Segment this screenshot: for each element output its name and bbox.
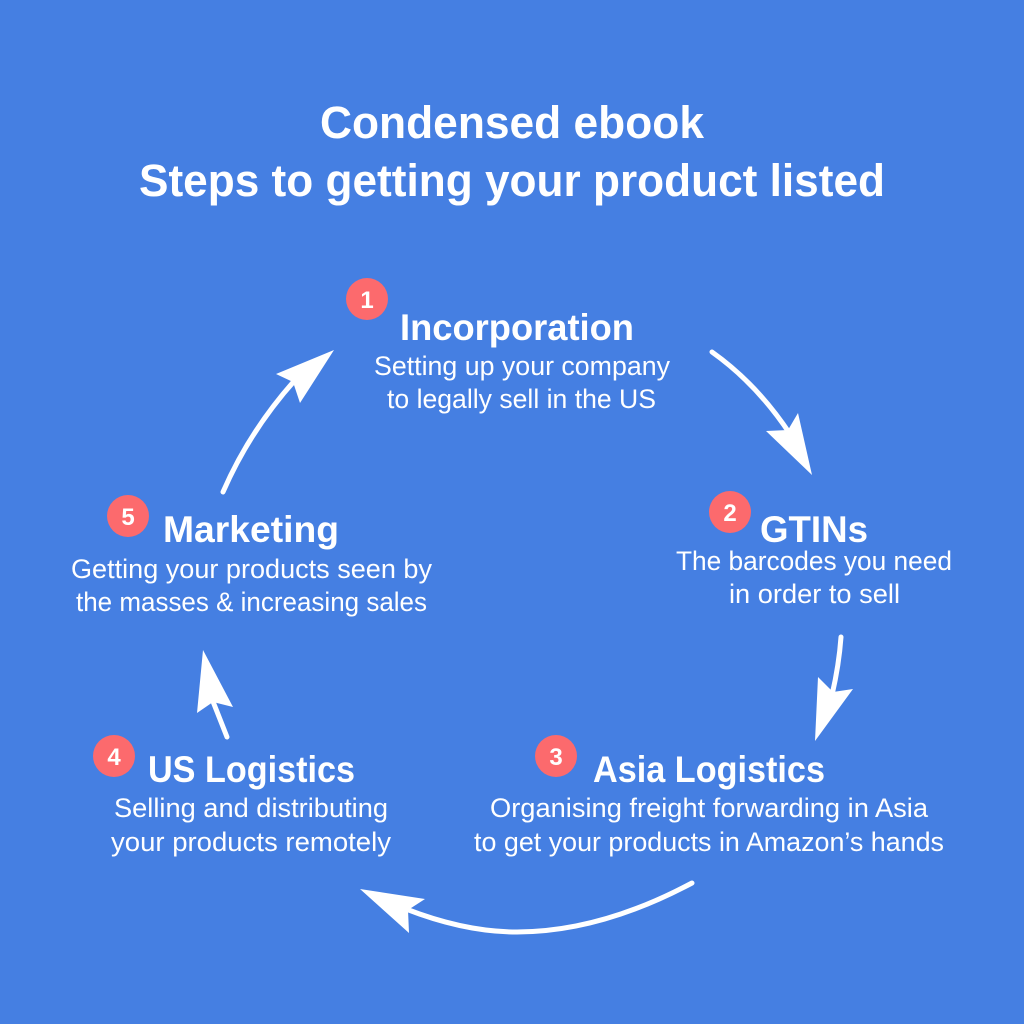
step 2 description: in order to sell: [729, 579, 900, 609]
step 4 heading: US Logistics: [148, 749, 355, 790]
step 2: GTINs: [676, 491, 952, 609]
step 5 description: Getting your products seen by: [71, 554, 433, 584]
title: [139, 97, 885, 206]
step 5 description: [71, 554, 433, 617]
step 2 description: [676, 546, 952, 609]
step 1 number badge: [346, 278, 388, 320]
step 5: marketing: [71, 495, 433, 617]
step 2 description: The barcodes you need: [676, 546, 952, 576]
step 2 number badge: [709, 491, 751, 533]
step 5 number badge: [107, 495, 149, 537]
step 5 description: the masses & increasing sales: [76, 587, 427, 617]
step 1 heading: Incorporation: [400, 307, 634, 348]
step 4: US logistics: [93, 735, 392, 857]
step 1 description: to legally sell in the US: [387, 384, 656, 414]
step 4 number badge: [93, 735, 135, 777]
arrow: step 5 to step 1: [223, 350, 334, 492]
step 4 number badge: 4: [107, 744, 121, 771]
step 3 number badge: [535, 735, 577, 777]
title: Steps to getting your product listed: [139, 155, 885, 206]
arrow: step 2 to step 3: [815, 637, 853, 741]
step 2 number badge: 2: [723, 500, 737, 527]
step 4 description: Selling and distributing: [114, 793, 388, 823]
step 2 heading: GTINs: [760, 509, 868, 550]
step 4 description: your products remotely: [111, 827, 392, 857]
arrow: step 4 to step 5: [197, 650, 233, 737]
step 1 description: Setting up your company: [374, 351, 671, 381]
step 3: asia logistics: [474, 735, 944, 857]
arrow: step 1 to step 2: [712, 352, 812, 475]
arrow: step 3 to step 4: [360, 883, 692, 933]
step 3 description: [474, 793, 944, 857]
step 1: incorporation: [346, 278, 671, 414]
step 5 heading: Marketing: [163, 509, 339, 550]
step 3 description: Organising freight forwarding in Asia: [490, 793, 928, 823]
step 3 description: to get your products in Amazon’s hands: [474, 827, 944, 857]
step 1 number badge: 1: [360, 287, 374, 314]
step 3 number badge: 3: [549, 744, 563, 771]
title: Condensed ebook: [320, 97, 705, 148]
step 5 number badge: 5: [121, 504, 135, 531]
step 3 heading: Asia Logistics: [593, 749, 825, 790]
step 1 description: [374, 351, 671, 414]
step 4 description: [111, 793, 392, 857]
